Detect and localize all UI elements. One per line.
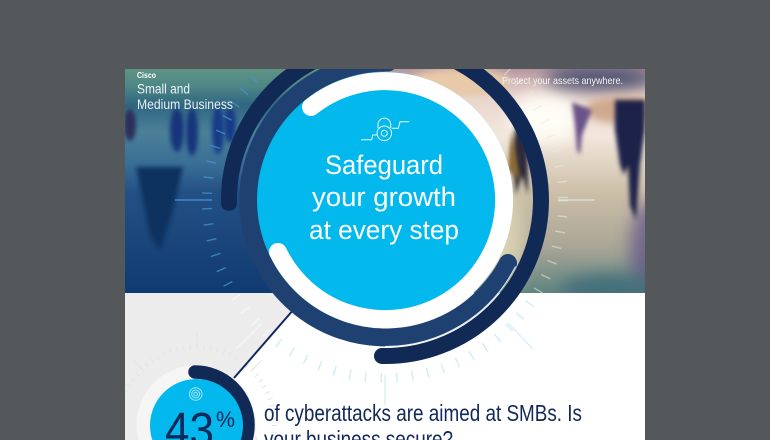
- ticks: large dial on photo right: [504, 69, 595, 293]
- light ring: [136, 365, 256, 440]
- tagline: Protect your assets anywhere.: [502, 75, 623, 87]
- brand block: Cisco: [137, 70, 156, 80]
- panel: white lower area: [125, 293, 645, 440]
- navy arc: [195, 372, 248, 440]
- title: at every step: [309, 215, 459, 245]
- connector line: [234, 309, 294, 378]
- stat description: [264, 404, 582, 440]
- ticks: large dial on photo left: [175, 69, 269, 287]
- ticks: large dial on grey wedge: [232, 294, 270, 349]
- brand block: Small and: [137, 82, 190, 96]
- percent sign: %: [216, 407, 235, 432]
- infographic canvas: [125, 69, 645, 440]
- ticks: large dial on lower area: [276, 293, 542, 405]
- ring highlight: [385, 266, 516, 346]
- icon: padlock on steps: [361, 118, 409, 141]
- blue disc: [257, 72, 513, 328]
- title: your growth: [312, 182, 456, 212]
- white arc: [278, 81, 504, 319]
- icon: target: [189, 388, 202, 400]
- middle blue ring: [248, 62, 508, 337]
- ticks: small dial: [118, 333, 274, 440]
- brand block: Medium Business: [137, 97, 233, 112]
- brand block: [137, 70, 233, 112]
- main dial: [229, 44, 541, 356]
- stat description: of cyberattacks are aimed at SMBs. Is: [264, 400, 582, 426]
- title: [309, 150, 459, 245]
- panel: blurred crowd photo: [125, 69, 645, 293]
- panel: grey lower-left wedge: [125, 293, 308, 440]
- outer navy arc: [229, 44, 541, 356]
- stat dial: [136, 365, 582, 440]
- blue disc: [150, 379, 243, 440]
- title: Safeguard: [325, 150, 443, 180]
